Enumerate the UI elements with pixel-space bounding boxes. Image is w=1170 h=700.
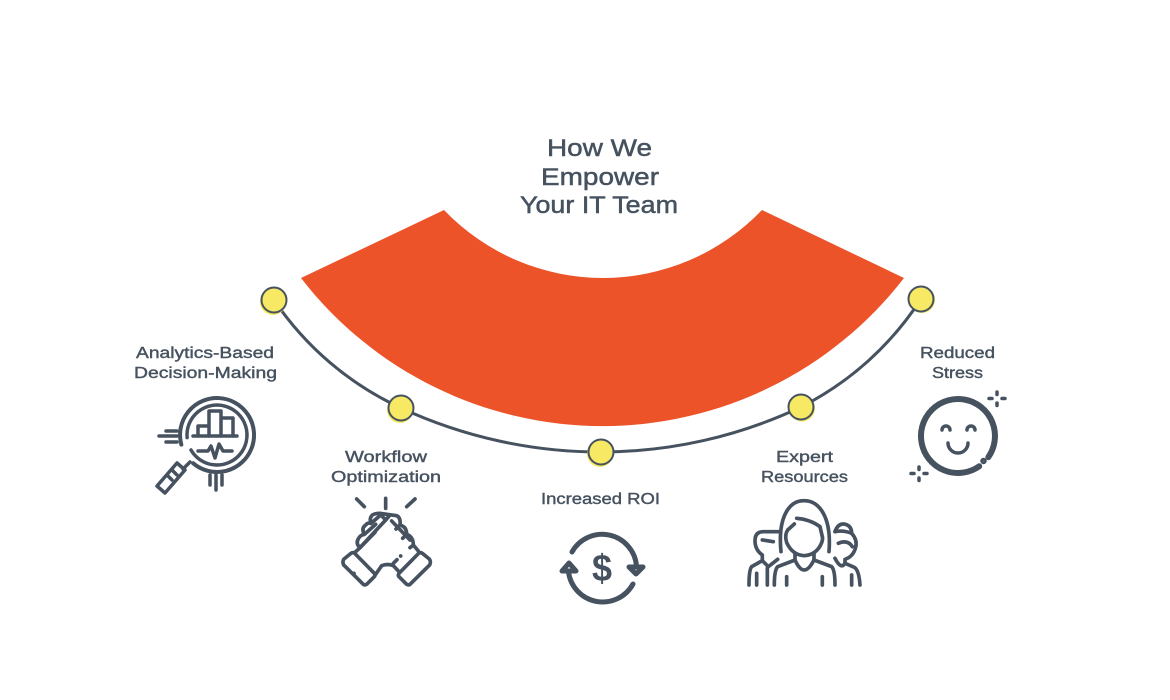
label: analytics: Decision-Making	[134, 365, 277, 382]
label: expert: Expert	[776, 449, 834, 466]
title: Your IT Team	[520, 192, 678, 219]
node: expert	[788, 394, 815, 422]
label: stress: Stress	[932, 365, 983, 382]
label: expert: Resources	[761, 469, 848, 486]
label: analytics: Analytics-Based	[136, 345, 274, 362]
orange arc band	[301, 210, 904, 426]
icon: team of people	[749, 501, 860, 585]
label: ROI: Increased ROI	[541, 491, 660, 508]
icon: handshake	[343, 498, 430, 585]
label: workflow	[331, 449, 441, 486]
title: Empower	[541, 164, 659, 191]
node: analytics	[260, 288, 286, 315]
timeline arc	[274, 299, 921, 452]
label: workflow: Workflow	[345, 449, 428, 466]
icon: smiley with sparkles	[911, 392, 1005, 480]
label: workflow: Optimization	[331, 469, 441, 486]
label: expert	[761, 449, 848, 486]
label: stress: Reduced	[920, 345, 995, 362]
title: How We	[547, 135, 652, 162]
icon: dollar cycle	[562, 534, 643, 602]
title	[520, 135, 678, 219]
node: stress	[908, 286, 935, 313]
node: workflow	[387, 396, 414, 423]
label: stress	[920, 345, 995, 382]
node: ROI	[587, 440, 614, 467]
label: analytics	[134, 345, 277, 382]
icon: magnifier with chart	[157, 398, 254, 493]
icon: dollar cycle: $	[592, 548, 612, 590]
